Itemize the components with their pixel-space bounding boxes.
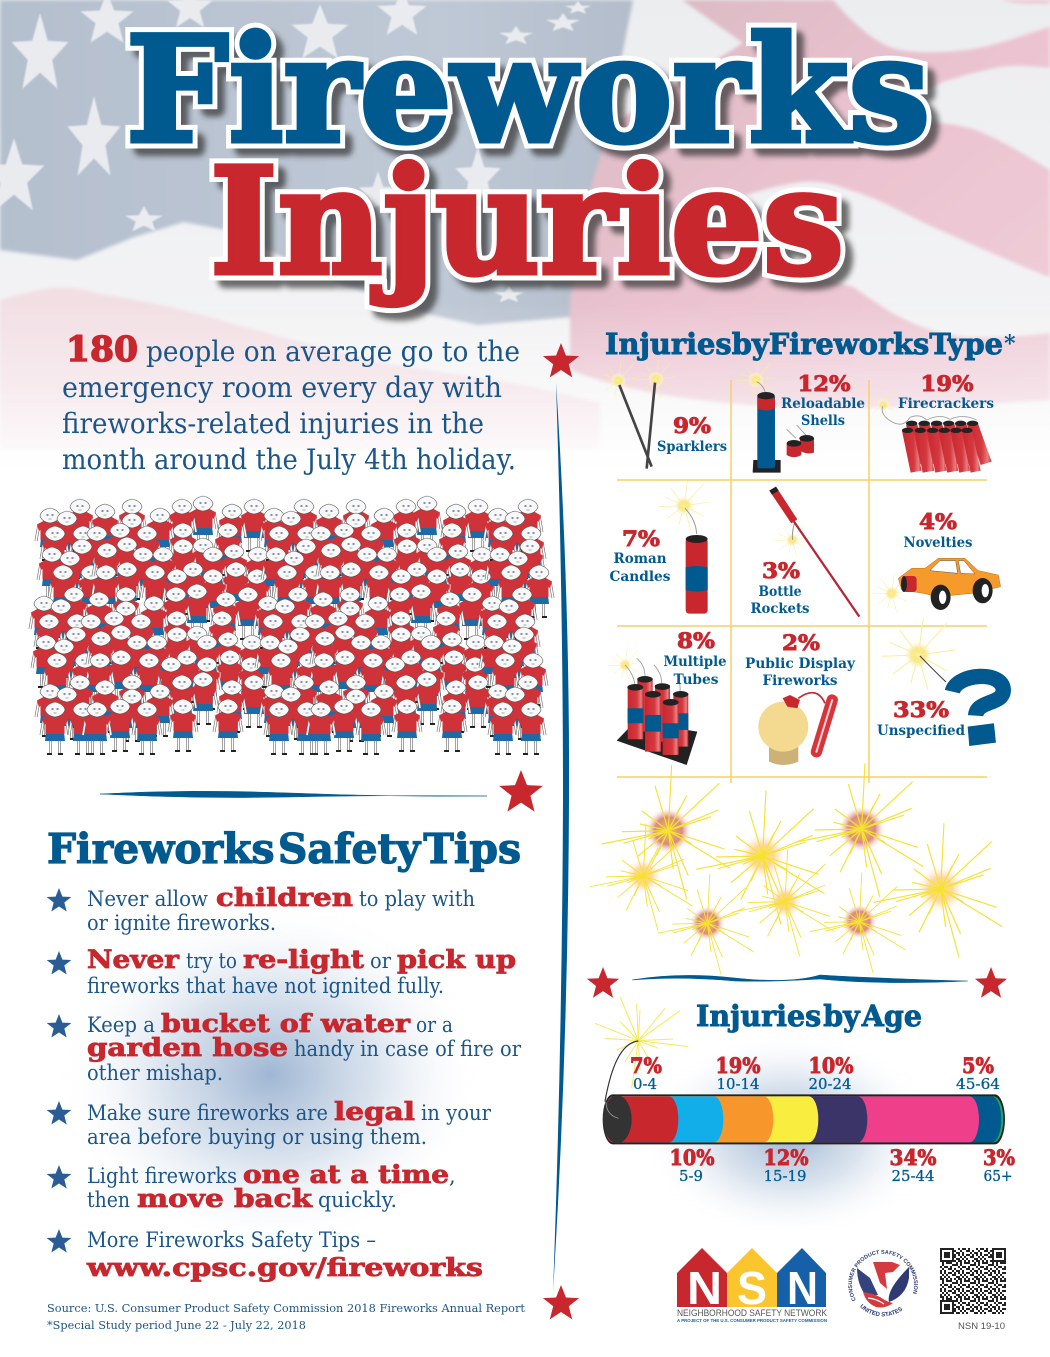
fireworks type icons <box>599 360 1003 765</box>
fireworks type labels: 12% <box>798 371 851 396</box>
age labels: 5-9 <box>679 1167 703 1185</box>
age labels: 5% <box>962 1053 994 1078</box>
flag background <box>0 0 1050 480</box>
fireworks type labels: Roman <box>614 551 666 567</box>
tip 4: in your <box>421 1101 492 1125</box>
tip 5: quickly. <box>318 1188 397 1212</box>
tip 5: , <box>449 1164 456 1188</box>
fireworks type labels: Multiple <box>664 654 727 670</box>
divider star and swoosh <box>100 770 543 812</box>
fireworks type labels: 9% <box>673 413 711 438</box>
intro statement: people on average go to the <box>146 335 520 368</box>
fireworks type labels: 2% <box>782 630 820 655</box>
fireworks type labels: Sparklers <box>657 439 727 455</box>
icon: multiple tubes <box>608 648 697 765</box>
age labels: 20-24 <box>808 1075 852 1093</box>
fireworks type labels: 4% <box>919 509 957 534</box>
logo: Neighborhood Safety Network: NEIGHBORHOOD SAFETY NETWORK <box>677 1308 827 1318</box>
title: Fireworks Injuries: Injuries <box>210 135 844 308</box>
tip 2 <box>47 945 516 998</box>
fireworks type labels: Bottle <box>758 584 802 600</box>
tip 5 <box>47 1160 456 1213</box>
tip 1 <box>47 883 475 935</box>
age labels: 12% <box>764 1145 809 1170</box>
tip 3: Keep a <box>87 1013 155 1037</box>
source note: Source: U.S. Consumer Product Safety Commission 2018 Fireworks Annual Report <box>47 1301 525 1315</box>
fireworks type labels: Fireworks <box>762 673 838 689</box>
tip 1: or ignite fireworks. <box>87 911 276 935</box>
tip 3: bucket of water <box>161 1009 411 1038</box>
fireworks type labels: Novelties <box>904 535 973 551</box>
age labels: 65+ <box>984 1167 1012 1185</box>
tip 6: website: More Fireworks Safety Tips – <box>87 1228 376 1252</box>
age bar: firework fuse chart <box>595 997 1005 1144</box>
icon: fuse spark <box>595 997 688 1102</box>
tip 3 <box>47 1009 522 1085</box>
tip 2: or <box>370 949 392 973</box>
title: Fireworks Injuries: Fireworks <box>126 5 930 176</box>
tip 2: Never <box>87 945 180 974</box>
title: Fireworks Injuries: Injuries <box>218 143 852 316</box>
tip 2: re-light <box>243 945 365 974</box>
heading: Injuries by Age: Injuries by Age <box>696 999 922 1033</box>
title: Fireworks Injuries <box>126 5 938 316</box>
logo: CPSC seal: CONSUMER PRODUCT SAFETY COMMISSION <box>848 1250 918 1301</box>
type grid lines <box>617 380 987 783</box>
tip 4 <box>47 1097 492 1149</box>
logo: CPSC seal: UNITED STATES <box>860 1304 902 1316</box>
QR code <box>940 1248 1006 1314</box>
title: Fireworks Injuries: Fireworks <box>134 13 938 184</box>
icon: sparklers <box>599 360 675 469</box>
divider stars and swoosh <box>587 967 1007 998</box>
logo: Neighborhood Safety Network: A PROJECT OF THE U.S. CONSUMER PRODUCT SAFETY COMMISSION <box>677 1318 827 1323</box>
tip 3: or a <box>416 1013 453 1037</box>
title: Fireworks Injuries: Fireworks <box>126 5 930 176</box>
tip 4: area before buying or using them. <box>87 1125 427 1149</box>
background glow: age chart <box>640 1030 940 1240</box>
fireworks type labels: 19% <box>920 371 974 396</box>
icon: public display shell <box>758 693 839 765</box>
tip 2: try to <box>186 949 237 973</box>
crowd of 180 people <box>30 496 553 754</box>
tip 5: move back <box>137 1184 313 1213</box>
tip 3: handy in case of fire or <box>294 1037 522 1061</box>
icon: car novelty <box>872 558 1001 612</box>
tip 4: legal <box>334 1097 415 1126</box>
tip 6: website: www.cpsc.gov/fireworks <box>86 1253 483 1282</box>
fireworks type labels: 3% <box>762 558 800 583</box>
logo: Neighborhood Safety Network: S <box>737 1262 767 1314</box>
tip 1: Never allow <box>87 887 208 911</box>
vertical divider with stars <box>543 343 579 1319</box>
heading: Fireworks Safety Tips: Fireworks Safety Tips <box>47 825 521 873</box>
logo: Neighborhood Safety Network: N <box>787 1262 818 1314</box>
intro statement: fireworks-related injuries in the <box>62 407 484 440</box>
fireworks type labels: Public Display <box>745 656 856 672</box>
fireworks bursts illustration <box>590 763 1002 975</box>
age labels: 3% <box>983 1145 1015 1170</box>
age labels: 7% <box>630 1053 662 1078</box>
tip 5: one at a time <box>243 1160 449 1189</box>
fireworks type labels: 7% <box>622 526 660 551</box>
tip 1: to play with <box>359 887 475 911</box>
fireworks type labels: 33% <box>893 697 949 722</box>
tip 3: other mishap. <box>87 1061 223 1085</box>
fireworks type labels: 8% <box>677 628 715 653</box>
intro statement <box>62 329 520 476</box>
fireworks type labels: Firecrackers <box>898 396 994 412</box>
age labels: 0-4 <box>633 1075 657 1093</box>
source note: *Special Study period June 22 - July 22, 2018 <box>47 1318 306 1332</box>
document code: NSN 19-10 <box>958 1321 1005 1332</box>
fireworks type labels: Candles <box>610 569 671 585</box>
heading: Injuries by Fireworks Type: * <box>1004 331 1016 357</box>
heading: Injuries by Fireworks Type: Injuries by Fireworks Type <box>605 327 1003 361</box>
age labels: 10% <box>670 1145 715 1170</box>
title: Fireworks Injuries: Injuries <box>210 135 844 308</box>
tip 1: children <box>216 883 353 912</box>
age labels: 19% <box>716 1053 761 1078</box>
logo: Neighborhood Safety Network <box>677 1248 827 1323</box>
fireworks type labels: Reloadable <box>781 396 865 412</box>
tip 2: pick up <box>397 945 516 974</box>
intro statement: emergency room every day with <box>62 371 502 404</box>
age labels: 15-19 <box>764 1167 806 1185</box>
fireworks type labels: Tubes <box>674 672 719 688</box>
icon: unspecified question mark <box>882 618 1003 746</box>
fireworks type labels: Shells <box>801 413 845 429</box>
age labels <box>630 1053 1015 1185</box>
icon: roman candle <box>659 481 709 614</box>
intro statement: month around the July 4th holiday. <box>62 443 516 476</box>
tip 5: then <box>87 1188 130 1212</box>
fireworks type labels <box>610 371 994 739</box>
icon: reloadable shells <box>737 361 814 473</box>
icon: bottle rocket <box>769 487 859 617</box>
age labels: 10% <box>808 1053 854 1078</box>
age labels: 10-14 <box>716 1075 760 1093</box>
age labels: 45-64 <box>956 1075 1000 1093</box>
tip 4: Make sure fireworks are <box>87 1101 328 1125</box>
intro statement: 180 <box>66 329 138 370</box>
fireworks type labels: Rockets <box>750 601 810 617</box>
icon: firecrackers <box>868 390 992 473</box>
logo: Neighborhood Safety Network: N <box>687 1262 722 1314</box>
tip 3: garden hose <box>87 1033 288 1062</box>
fireworks type labels: Unspecified <box>877 723 965 739</box>
age labels: 34% <box>890 1145 937 1170</box>
tip 6: website <box>47 1228 483 1282</box>
background glow: safety tips <box>55 900 485 1250</box>
tip 5: Light fireworks <box>87 1164 237 1188</box>
tip 2: fireworks that have not ignited fully. <box>87 974 444 998</box>
source note <box>47 1301 525 1332</box>
age labels: 25-44 <box>892 1167 934 1185</box>
